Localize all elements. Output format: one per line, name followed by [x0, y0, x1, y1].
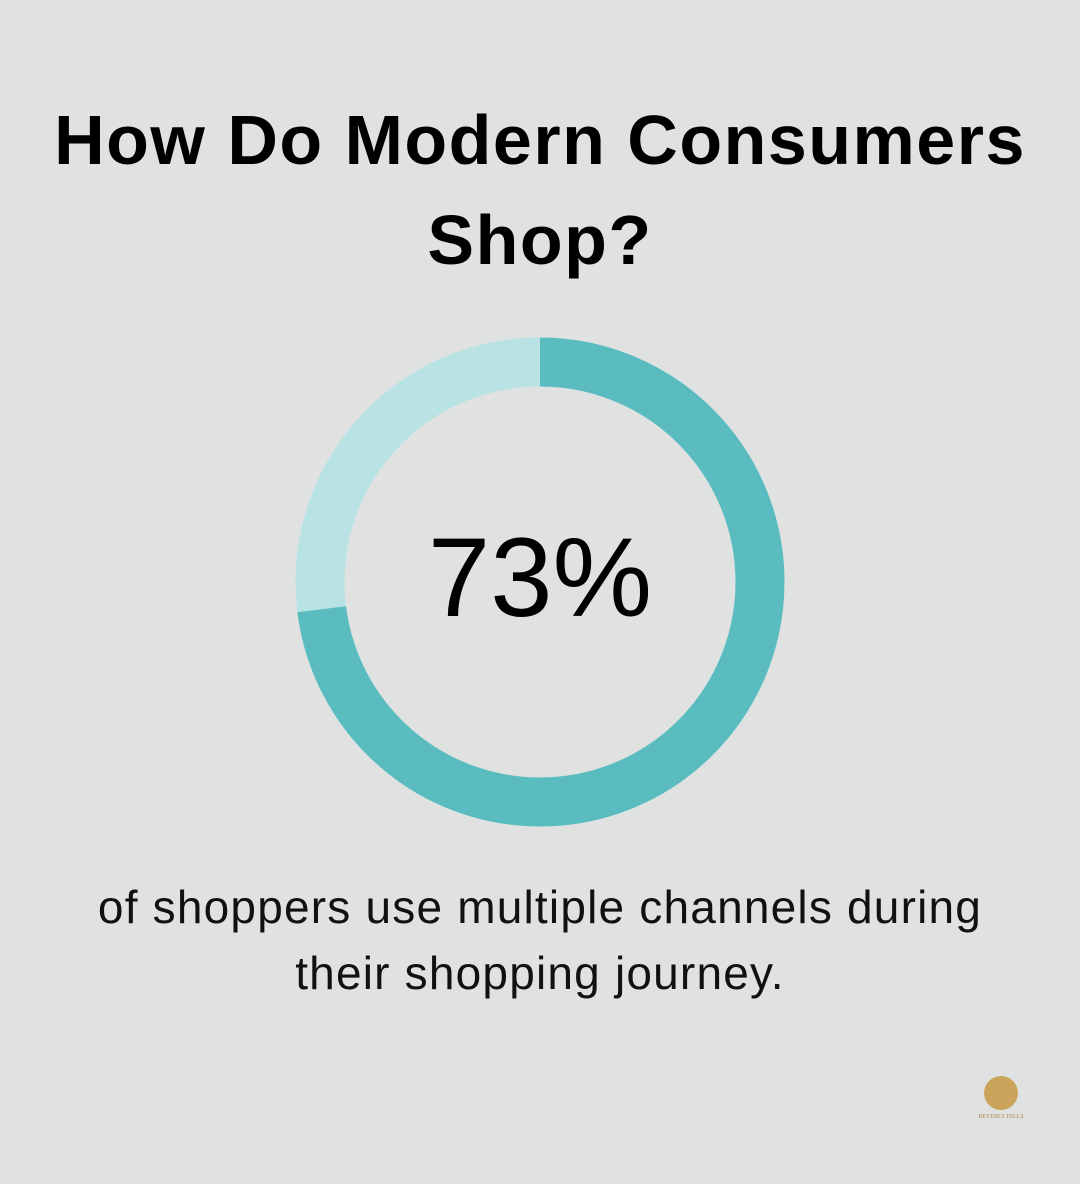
title: Shop? [427, 201, 653, 279]
subtitle text [98, 881, 982, 999]
subtitle text: their shopping journey. [295, 947, 785, 999]
subtitle text: of shoppers use multiple channels during [98, 881, 982, 933]
title [54, 101, 1026, 279]
title: How Do Modern Consumers [54, 101, 1026, 179]
logo: BEVERLY HILLS [978, 1114, 1024, 1120]
donut chart: 73% [428, 515, 652, 640]
logo [978, 1076, 1024, 1120]
